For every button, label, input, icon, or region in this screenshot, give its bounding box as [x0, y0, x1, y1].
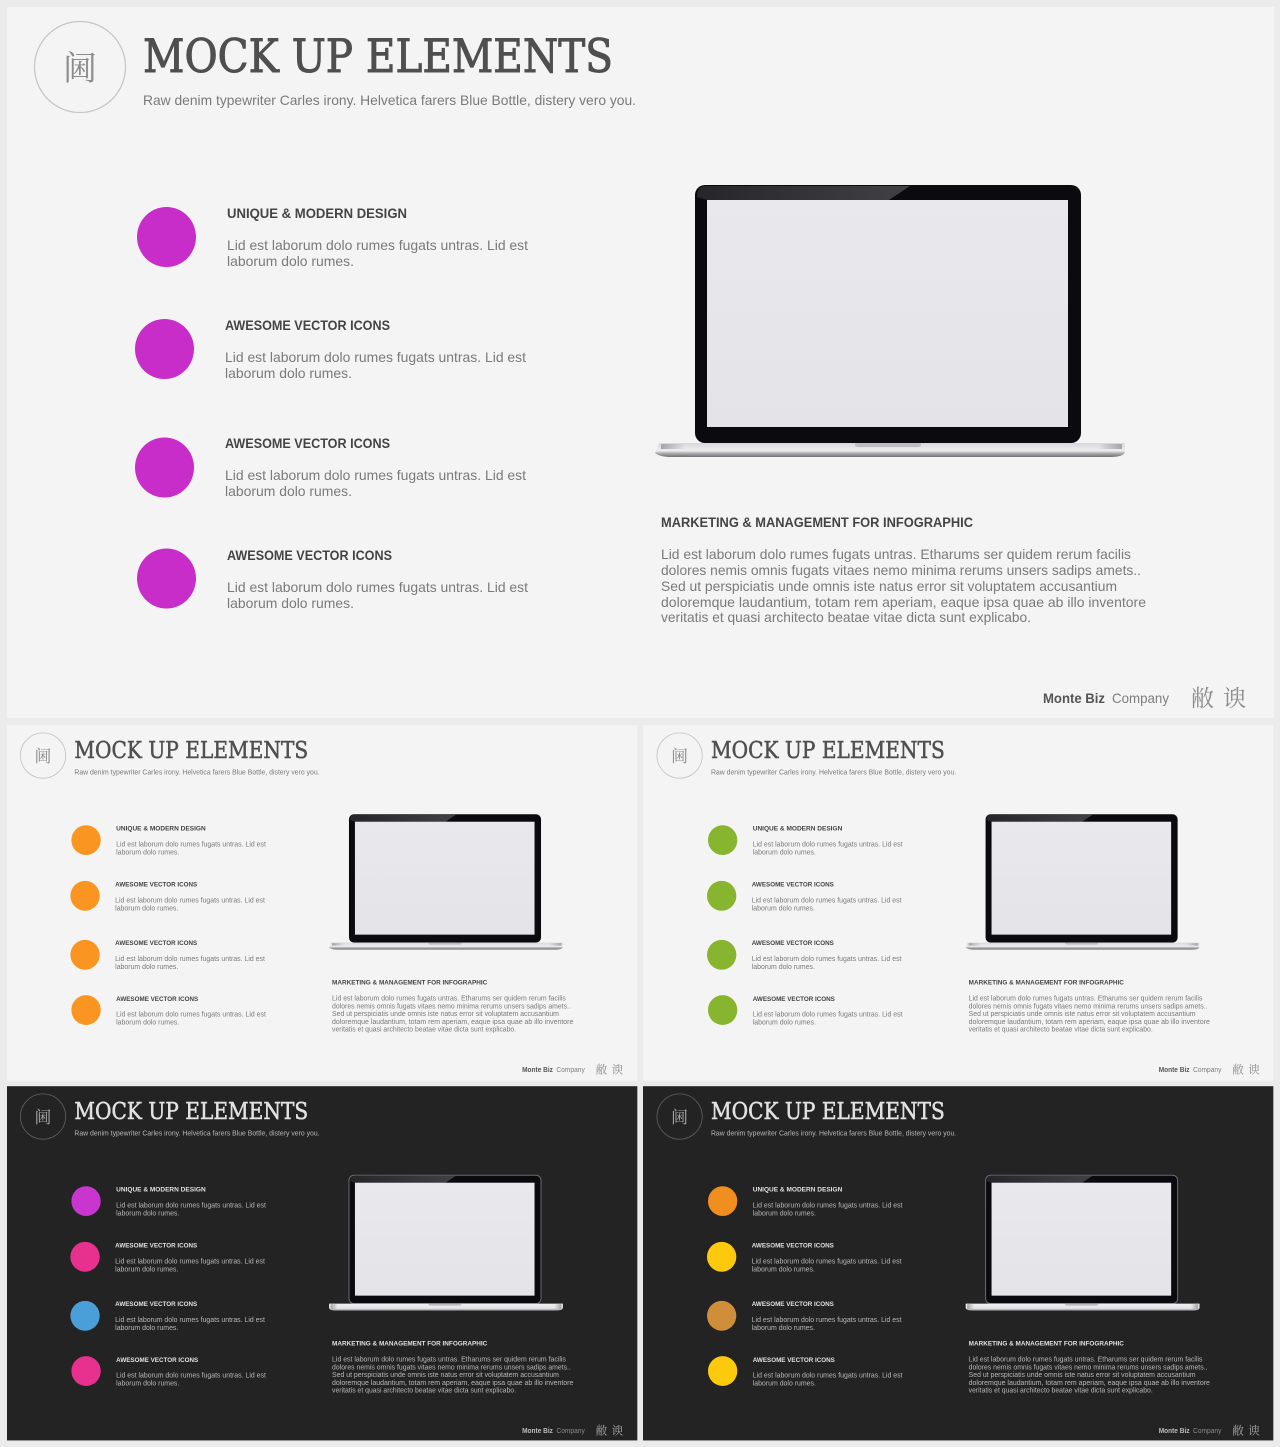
subtitle: Raw denim typewriter Carles irony. Helvetica farers Blue Bottle, distery vero you. [711, 769, 956, 776]
footer brand: Company [1193, 1067, 1222, 1074]
description block [969, 1340, 1210, 1395]
feature item 3: AWESOME VECTOR ICONS [225, 436, 390, 451]
feature item 4: laborum dolo rumes. [227, 595, 354, 611]
description block: Lid est laborum dolo rumes fugats untras. Etharums ser quidem rerum facilis [332, 1356, 566, 1363]
slide: small dark multicolour warm [643, 1086, 1273, 1440]
footer brand: Monte Biz [1159, 1067, 1190, 1074]
feature item 4: AWESOME VECTOR ICONS [116, 1357, 199, 1364]
slide: small dark multicolour cool [7, 1086, 637, 1440]
footer brand: 敝 [1232, 1422, 1244, 1438]
title: MOCK UP ELEMENTS [74, 738, 308, 764]
logo badge [657, 1094, 702, 1139]
footer brand [1043, 680, 1246, 713]
footer brand: 谀 [1248, 1422, 1260, 1438]
feature item 2: Lid est laborum dolo rumes fugats untras. Lid est [115, 897, 265, 904]
feature item 2: AWESOME VECTOR ICONS [225, 318, 390, 333]
feature item 1: Lid est laborum dolo rumes fugats untras. Lid est [116, 842, 266, 849]
description block: Sed ut perspiciatis unde omnis iste natus error sit voluptatem accusantium [661, 578, 1117, 594]
logo badge [657, 733, 702, 778]
subtitle: Raw denim typewriter Carles irony. Helvetica farers Blue Bottle, distery vero you. [74, 769, 320, 776]
feature item 1 [137, 206, 528, 269]
feature item 2: laborum dolo rumes. [752, 1266, 815, 1273]
feature item 4 [708, 995, 903, 1027]
feature item 4: laborum dolo rumes. [116, 1020, 179, 1027]
logo badge [20, 1094, 66, 1139]
feature item 4: AWESOME VECTOR ICONS [753, 1357, 835, 1364]
feature item 1: laborum dolo rumes. [753, 850, 816, 857]
feature item 1: Lid est laborum dolo rumes fugats untras. Lid est [753, 842, 903, 849]
description block: MARKETING & MANAGEMENT FOR INFOGRAPHIC [969, 979, 1124, 986]
feature item 3 [70, 1301, 265, 1332]
feature item 4: Lid est laborum dolo rumes fugats untras. Lid est [227, 579, 528, 595]
feature item 1 [708, 1186, 903, 1218]
feature item 4: AWESOME VECTOR ICONS [753, 996, 835, 1003]
feature item 3 [707, 940, 902, 971]
description block: MARKETING & MANAGEMENT FOR INFOGRAPHIC [332, 1340, 487, 1347]
description block: dolores nemis omnis fugats vitaes nemo minima rerums unsers sadips amets.. [969, 1364, 1208, 1371]
feature item 4: Lid est laborum dolo rumes fugats untras. Lid est [753, 1373, 903, 1380]
feature item 1 [708, 825, 903, 857]
feature item 3: AWESOME VECTOR ICONS [115, 1301, 198, 1308]
feature item 2 [70, 881, 265, 912]
feature item 4: laborum dolo rumes. [753, 1020, 816, 1027]
feature item 1: laborum dolo rumes. [116, 850, 179, 857]
description block: Sed ut perspiciatis unde omnis iste natus error sit voluptatem accusantium [332, 1372, 559, 1379]
feature item 2: Lid est laborum dolo rumes fugats untras. Lid est [225, 349, 526, 365]
feature item 2 [707, 881, 902, 912]
feature item 3: Lid est laborum dolo rumes fugats untras. Lid est [752, 1317, 902, 1324]
subtitle: Raw denim typewriter Carles irony. Helvetica farers Blue Bottle, distery vero you. [74, 1130, 320, 1137]
footer brand: Company [1193, 1428, 1222, 1435]
logo badge: 阃 [671, 1104, 688, 1128]
feature item 1: laborum dolo rumes. [227, 253, 354, 269]
description block: veritatis et quasi architecto beatae vitae dicta sunt explicabo. [661, 609, 1031, 625]
description block: doloremque laudantium, totam rem aperiam, eaque ipsa quae ab illo inventore [661, 594, 1146, 610]
feature item 2: Lid est laborum dolo rumes fugats untras. Lid est [752, 897, 902, 904]
description block: dolores nemis omnis fugats vitaes nemo minima rerums unsers sadips amets.. [969, 1003, 1208, 1010]
subtitle: Raw denim typewriter Carles irony. Helvetica farers Blue Bottle, distery vero you. [711, 1130, 956, 1137]
feature item 2: laborum dolo rumes. [115, 905, 178, 912]
feature item 2: AWESOME VECTOR ICONS [115, 881, 198, 888]
description block [969, 979, 1210, 1034]
footer brand [522, 1422, 624, 1438]
feature item 2: laborum dolo rumes. [225, 365, 352, 381]
description block: doloremque laudantium, totam rem aperiam, eaque ipsa quae ab illo inventore [332, 1019, 573, 1026]
feature item 4 [708, 1356, 903, 1388]
feature item 1: UNIQUE & MODERN DESIGN [753, 826, 842, 833]
description block: veritatis et quasi architecto beatae vitae dicta sunt explicabo. [969, 1027, 1153, 1034]
feature item 1: Lid est laborum dolo rumes fugats untras. Lid est [753, 1203, 903, 1210]
title: MOCK UP ELEMENTS [143, 29, 613, 83]
feature item 3: Lid est laborum dolo rumes fugats untras. Lid est [115, 1317, 265, 1324]
feature item 3: laborum dolo rumes. [752, 1325, 815, 1332]
feature item 3: Lid est laborum dolo rumes fugats untras. Lid est [225, 467, 526, 483]
footer brand: Company [556, 1428, 585, 1435]
subtitle: Raw denim typewriter Carles irony. Helvetica farers Blue Bottle, distery vero you. [143, 92, 636, 108]
feature item 4: Lid est laborum dolo rumes fugats untras. Lid est [116, 1012, 266, 1019]
description block: MARKETING & MANAGEMENT FOR INFOGRAPHIC [332, 979, 487, 986]
footer brand: 敝 [1232, 1061, 1244, 1077]
footer brand: Company [1112, 690, 1169, 706]
feature item 3 [70, 940, 265, 971]
logo badge: 阃 [35, 743, 51, 767]
laptop mockup [655, 185, 1125, 457]
title: MOCK UP ELEMENTS [711, 1099, 945, 1125]
description block: Lid est laborum dolo rumes fugats untras. Etharums ser quidem rerum facilis [332, 995, 566, 1002]
feature item 4: AWESOME VECTOR ICONS [227, 548, 392, 563]
feature item 4 [71, 995, 266, 1027]
feature item 3: laborum dolo rumes. [115, 964, 178, 971]
feature item 1 [71, 825, 266, 857]
feature item 1: UNIQUE & MODERN DESIGN [116, 1187, 206, 1194]
description block: Sed ut perspiciatis unde omnis iste natus error sit voluptatem accusantium [969, 1011, 1196, 1018]
feature item 1: laborum dolo rumes. [753, 1211, 816, 1218]
description block: MARKETING & MANAGEMENT FOR INFOGRAPHIC [661, 515, 973, 530]
footer brand: Monte Biz [522, 1428, 553, 1435]
feature item 3: laborum dolo rumes. [115, 1325, 178, 1332]
slide: small light orange [7, 725, 637, 1081]
feature item 4: laborum dolo rumes. [753, 1381, 816, 1388]
laptop mockup [966, 1175, 1200, 1311]
logo badge: 阃 [671, 743, 688, 767]
footer brand: 敝 [596, 1061, 608, 1077]
feature item 4 [137, 548, 528, 611]
feature item 4: laborum dolo rumes. [116, 1381, 179, 1388]
feature item 2: laborum dolo rumes. [115, 1266, 178, 1273]
feature item 4: Lid est laborum dolo rumes fugats untras. Lid est [753, 1012, 903, 1019]
footer brand: 敝 [1191, 680, 1214, 713]
feature item 2: laborum dolo rumes. [752, 905, 815, 912]
description block [661, 515, 1146, 625]
slide: large light purple [7, 7, 1274, 718]
description block: Sed ut perspiciatis unde omnis iste natus error sit voluptatem accusantium [332, 1011, 559, 1018]
description block: Lid est laborum dolo rumes fugats untras. Etharums ser quidem rerum facilis [969, 995, 1203, 1002]
feature item 3: laborum dolo rumes. [752, 964, 815, 971]
footer brand: Monte Biz [522, 1067, 553, 1074]
feature item 4 [71, 1356, 266, 1388]
footer brand: 谀 [1223, 680, 1246, 713]
feature item 4: AWESOME VECTOR ICONS [116, 996, 199, 1003]
footer brand: Monte Biz [1043, 690, 1105, 706]
description block: veritatis et quasi architecto beatae vitae dicta sunt explicabo. [332, 1027, 516, 1034]
feature item 3: AWESOME VECTOR ICONS [752, 940, 834, 947]
description block: Sed ut perspiciatis unde omnis iste natus error sit voluptatem accusantium [969, 1372, 1196, 1379]
description block: doloremque laudantium, totam rem aperiam, eaque ipsa quae ab illo inventore [332, 1380, 573, 1387]
feature item 2: Lid est laborum dolo rumes fugats untras. Lid est [752, 1258, 902, 1265]
feature item 1: Lid est laborum dolo rumes fugats untras. Lid est [116, 1203, 266, 1210]
description block: dolores nemis omnis fugats vitaes nemo minima rerums unsers sadips amets.. [661, 562, 1141, 578]
feature item 1: UNIQUE & MODERN DESIGN [116, 826, 206, 833]
description block: veritatis et quasi architecto beatae vitae dicta sunt explicabo. [332, 1388, 516, 1395]
feature item 3: Lid est laborum dolo rumes fugats untras. Lid est [752, 956, 902, 963]
description block: doloremque laudantium, totam rem aperiam, eaque ipsa quae ab illo inventore [969, 1019, 1210, 1026]
feature item 2: AWESOME VECTOR ICONS [752, 1242, 834, 1249]
description block [332, 1340, 573, 1395]
feature item 2: Lid est laborum dolo rumes fugats untras. Lid est [115, 1258, 265, 1265]
logo badge: 阃 [63, 41, 97, 90]
slide: small light green [643, 725, 1273, 1081]
description block: Lid est laborum dolo rumes fugats untras. Etharums ser quidem rerum facilis [969, 1356, 1203, 1363]
feature item 1 [71, 1186, 266, 1218]
description block: MARKETING & MANAGEMENT FOR INFOGRAPHIC [969, 1340, 1124, 1347]
laptop mockup [329, 1175, 563, 1311]
footer brand: Company [556, 1067, 585, 1074]
footer brand: Monte Biz [1159, 1428, 1190, 1435]
feature item 3 [707, 1301, 902, 1332]
footer brand: 谀 [612, 1422, 624, 1438]
description block: dolores nemis omnis fugats vitaes nemo minima rerums unsers sadips amets.. [332, 1364, 571, 1371]
feature item 1: UNIQUE & MODERN DESIGN [227, 206, 407, 221]
title: MOCK UP ELEMENTS [711, 738, 945, 764]
footer brand: 谀 [1248, 1061, 1260, 1077]
laptop mockup [329, 814, 563, 950]
feature item 4: Lid est laborum dolo rumes fugats untras. Lid est [116, 1373, 266, 1380]
feature item 2: AWESOME VECTOR ICONS [752, 881, 834, 888]
feature item 2 [707, 1242, 902, 1273]
description block [332, 979, 573, 1034]
footer brand: 敝 [596, 1422, 608, 1438]
feature item 3 [135, 436, 526, 499]
feature item 1: laborum dolo rumes. [116, 1211, 179, 1218]
footer brand [1159, 1061, 1260, 1077]
laptop mockup [966, 814, 1200, 950]
feature item 2: AWESOME VECTOR ICONS [115, 1242, 198, 1249]
footer brand: 谀 [612, 1061, 624, 1077]
logo badge: 阃 [35, 1104, 51, 1128]
feature item 1: UNIQUE & MODERN DESIGN [753, 1187, 842, 1194]
logo badge [34, 22, 126, 112]
feature item 2 [135, 318, 526, 381]
logo badge [20, 733, 66, 778]
footer brand [1159, 1422, 1260, 1438]
title: MOCK UP ELEMENTS [74, 1099, 308, 1125]
feature item 3: AWESOME VECTOR ICONS [115, 940, 198, 947]
feature item 1: Lid est laborum dolo rumes fugats untras. Lid est [227, 237, 528, 253]
description block: veritatis et quasi architecto beatae vitae dicta sunt explicabo. [969, 1388, 1153, 1395]
description block: doloremque laudantium, totam rem aperiam, eaque ipsa quae ab illo inventore [969, 1380, 1210, 1387]
description block: dolores nemis omnis fugats vitaes nemo minima rerums unsers sadips amets.. [332, 1003, 571, 1010]
footer brand [522, 1061, 624, 1077]
feature item 3: laborum dolo rumes. [225, 483, 352, 499]
feature item 2 [70, 1242, 265, 1273]
feature item 3: AWESOME VECTOR ICONS [752, 1301, 834, 1308]
description block: Lid est laborum dolo rumes fugats untras. Etharums ser quidem rerum facilis [661, 546, 1131, 562]
feature item 3: Lid est laborum dolo rumes fugats untras. Lid est [115, 956, 265, 963]
